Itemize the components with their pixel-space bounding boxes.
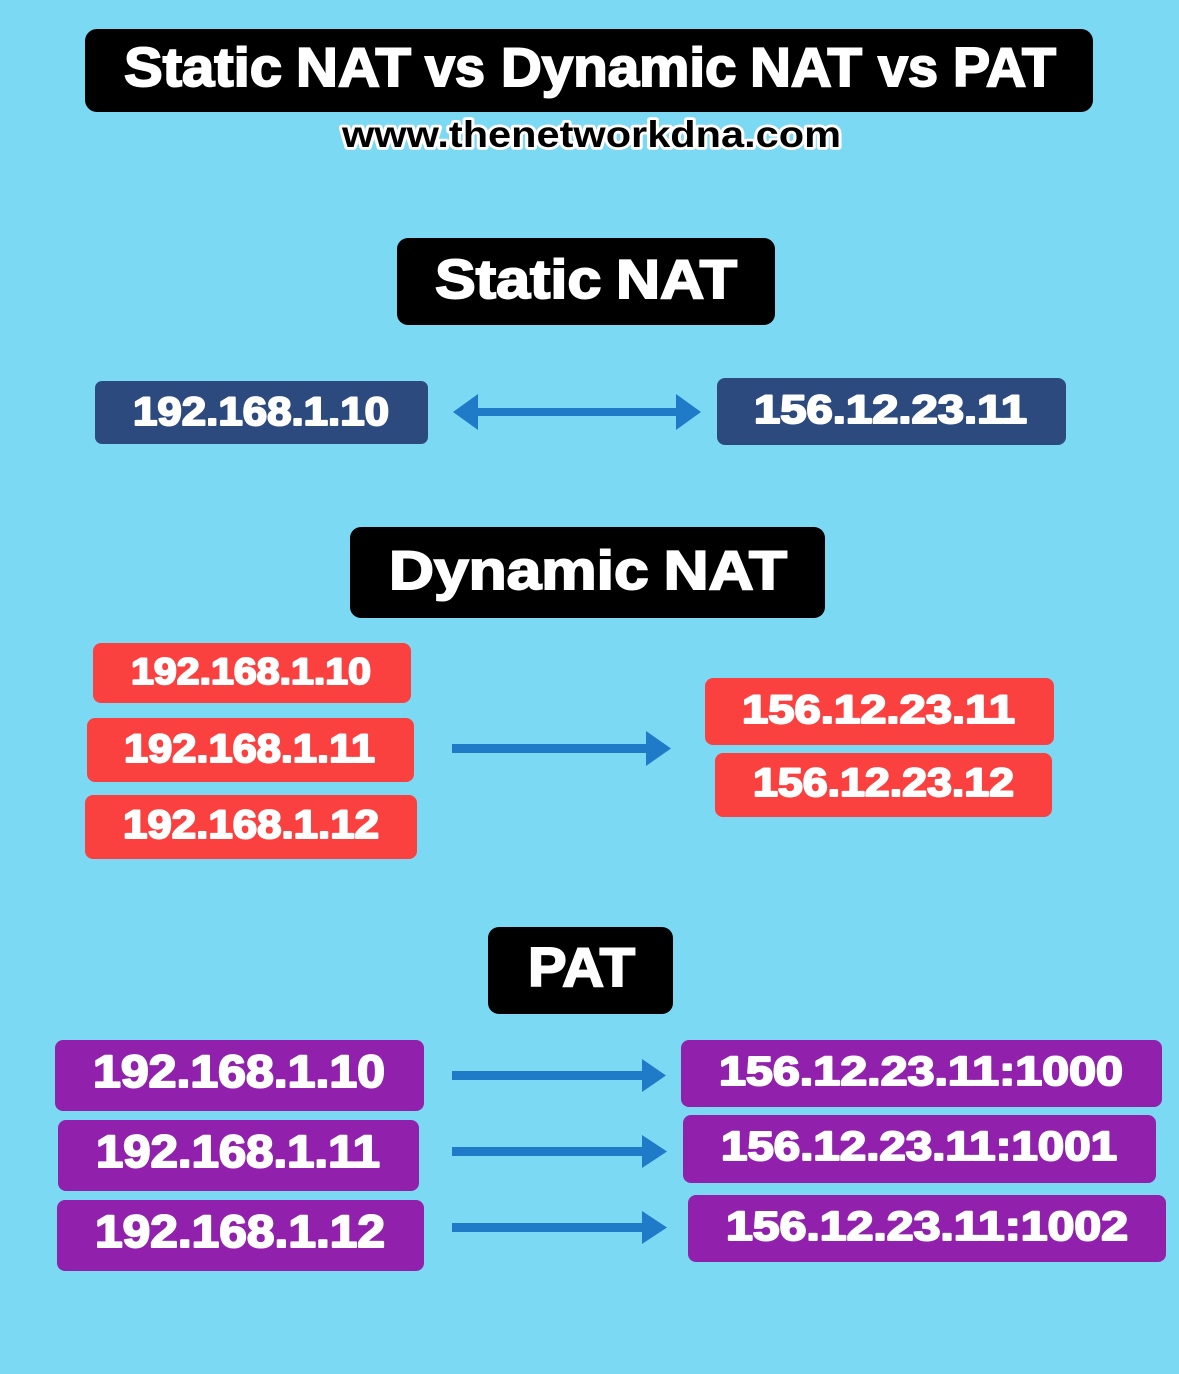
arrow 1 bbox=[452, 1059, 666, 1092]
title: vs bbox=[878, 36, 938, 98]
panel: dynamic NAT mapping bbox=[85, 643, 1054, 859]
public address 2: 156.12.23.12 bbox=[753, 761, 1014, 805]
public port 1001: 156.12.23.11:1001 bbox=[721, 1123, 1117, 1169]
public port 1002: 156.12.23.11:1002 bbox=[726, 1203, 1128, 1249]
title: vs bbox=[425, 36, 485, 98]
private address 1: 192.168.1.10 bbox=[93, 1046, 385, 1097]
title bbox=[85, 29, 1093, 112]
private address 3: 192.168.1.12 bbox=[123, 803, 379, 847]
private address 2: 192.168.1.11 bbox=[96, 1126, 380, 1177]
private address 2 bbox=[58, 1120, 419, 1191]
private address 3: 192.168.1.12 bbox=[95, 1206, 385, 1257]
heading: PAT bbox=[488, 927, 673, 1014]
arrow 3 bbox=[452, 1211, 667, 1244]
heading: Dynamic NAT: Dynamic NAT bbox=[389, 539, 787, 601]
private address 2: 192.168.1.11 bbox=[124, 727, 375, 771]
private address bbox=[95, 381, 428, 444]
public port 1002 bbox=[688, 1195, 1166, 1262]
private address 1 bbox=[93, 643, 411, 703]
panel: static NAT mapping bbox=[95, 378, 1066, 445]
public address bbox=[717, 378, 1066, 445]
private address 3 bbox=[57, 1200, 424, 1271]
panel: PAT mapping bbox=[55, 1040, 1166, 1271]
heading: Dynamic NAT bbox=[350, 527, 825, 618]
title: Dynamic NAT bbox=[501, 36, 862, 98]
private address 2 bbox=[87, 718, 414, 782]
public address: 156.12.23.11 bbox=[754, 388, 1027, 432]
title: PAT bbox=[953, 36, 1056, 98]
private address 1 bbox=[55, 1040, 424, 1111]
arrow: bidirectional bbox=[453, 394, 701, 430]
arrow 2 bbox=[452, 1135, 667, 1168]
arrow bbox=[452, 731, 671, 766]
private address: 192.168.1.10 bbox=[133, 390, 389, 434]
public port 1000 bbox=[681, 1040, 1162, 1107]
heading: PAT: PAT bbox=[528, 936, 635, 998]
title: Static NAT bbox=[124, 36, 411, 98]
public port 1001 bbox=[683, 1115, 1156, 1183]
public address 2 bbox=[715, 753, 1052, 817]
private address 1: 192.168.1.10 bbox=[131, 651, 371, 692]
website url: www.thenetworkdna.com bbox=[341, 114, 841, 155]
public port 1000: 156.12.23.11:1000 bbox=[719, 1048, 1123, 1094]
public address 1: 156.12.23.11 bbox=[742, 688, 1015, 732]
private address 3 bbox=[85, 795, 417, 859]
public address 1 bbox=[705, 678, 1054, 745]
heading: Static NAT bbox=[397, 238, 775, 325]
heading: Static NAT: Static NAT bbox=[435, 248, 737, 310]
